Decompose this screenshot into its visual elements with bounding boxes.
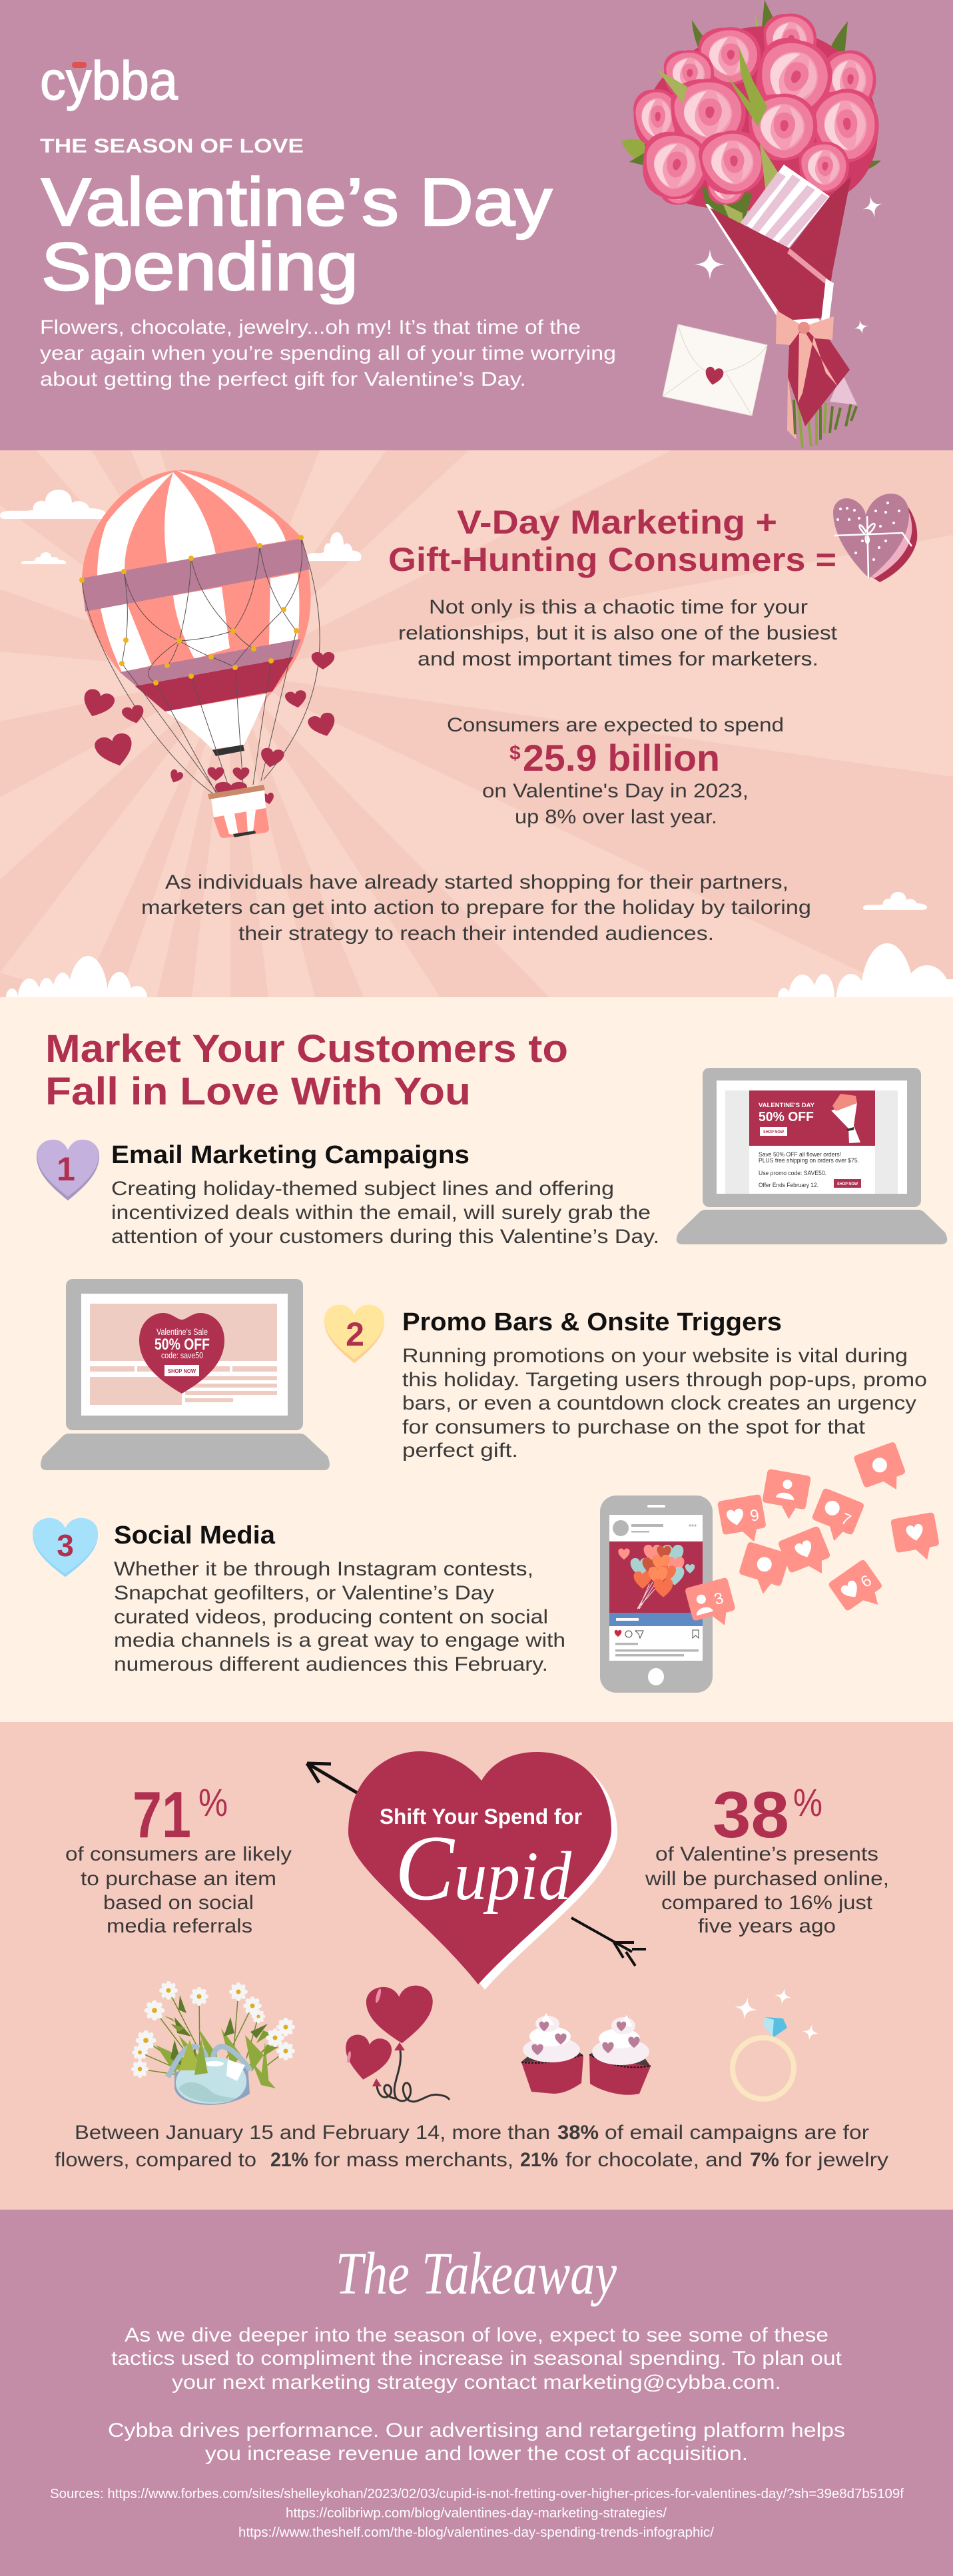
phone (600, 1496, 713, 1693)
bubble: heart 9 (717, 1494, 769, 1547)
heart heading: Shift Your Spend for (380, 1805, 582, 1829)
text: about Cybba: you increase revenue and lower the cost of acquisition. (205, 2443, 748, 2465)
item 3: social media (114, 1521, 565, 1675)
icon: candy heart 1: 1 (57, 1150, 75, 1188)
item 1: email marketing: Creating holiday-themed subject lines and offering (111, 1178, 614, 1200)
heading: Gift-Hunting Consumers = (388, 541, 836, 578)
text: busy time: Not only is this a chaotic time for your (429, 596, 808, 618)
bubble: heart 6: 6 (858, 1571, 875, 1591)
illustration: balloon bunch (618, 1545, 695, 1609)
logo: cybba: cybba (40, 51, 178, 111)
text: email campaigns comparison: for chocolate, and (565, 2149, 743, 2171)
text: email campaigns comparison: 21% (520, 2149, 558, 2171)
sources: https://www.theshelf.com/the-blog/valentines-day-spending-trends-infographic/ (238, 2525, 714, 2540)
icon: candy heart 1 (37, 1140, 99, 1200)
heading (388, 504, 836, 578)
panel: market your customers (0, 997, 953, 1722)
stat: 38 percent: of Valentine’s presents (655, 1843, 878, 1865)
laptop: email: SHOP NOW (763, 1130, 785, 1134)
arrow: upper left (307, 1763, 374, 1803)
panel: takeaway (0, 2210, 953, 2576)
text: email campaigns comparison: of email campaigns are for (605, 2122, 869, 2144)
stat: 38 percent: 38 (713, 1778, 789, 1851)
bubble: chat far (853, 1442, 910, 1500)
item 1: email marketing (111, 1141, 659, 1248)
illustration: flowers in kettle (131, 1981, 295, 2105)
bubble: chat 7 (807, 1488, 865, 1547)
bubble: person 3: 3 (712, 1589, 725, 1609)
stat: 25.9 billion: on Valentine's Day in 2023, (482, 780, 749, 802)
laptop: promo popup (41, 1279, 330, 1470)
laptop: email (677, 1068, 947, 1244)
item 2: promo bars: for consumers to purchase on the spot for that (402, 1416, 866, 1438)
stat: 71 percent: media referrals (107, 1915, 252, 1937)
text: takeaway body: As we dive deeper into the season of love, expect to see some of these (125, 2324, 828, 2346)
item 1: email marketing: incentivized deals within the email, will surely grab the (111, 1202, 651, 1224)
intro text: about getting the perfect gift for Valentine’s Day. (40, 368, 526, 390)
bubble: heart (890, 1512, 942, 1565)
text: busy time: relationships, but it is also one of the busiest (398, 622, 838, 644)
stat: 38 percent (645, 1778, 889, 1937)
item 3: social media: Whether it be through Instagram contests, (114, 1558, 533, 1580)
laptop: promo popup: code: save50 (161, 1351, 203, 1360)
item 2: promo bars: Promo Bars & Onsite Triggers (402, 1308, 782, 1336)
laptop: email: VALENTINE'S DAY (759, 1102, 815, 1109)
text: email campaigns comparison (55, 2122, 888, 2171)
item 3: social media: media channels is a great way to engage with (114, 1629, 565, 1651)
laptop: email: SHOP NOW (837, 1182, 858, 1186)
icon: candy heart 3 (33, 1518, 98, 1577)
text: takeaway body: tactics used to compliment the increase in seasonal spending. To plan out (111, 2348, 842, 2369)
stat: 38 percent: five years ago (698, 1915, 836, 1937)
cloud: bottom right (778, 943, 953, 997)
script word: Cupid: Cupid (395, 1817, 572, 1920)
bubble: person (760, 1469, 811, 1521)
text: email campaigns comparison: flowers, compared to (55, 2149, 256, 2171)
clouds (0, 490, 953, 1051)
text: about Cybba: Cybba drives performance. Our advertising and retargeting platform helps (108, 2419, 845, 2441)
laptop: promo popup: SHOP NOW (168, 1368, 196, 1374)
stat: 71 percent: of consumers are likely (65, 1843, 292, 1865)
icon: heart gift box (833, 494, 917, 582)
text: busy time (398, 596, 838, 670)
cloud: bottom left (6, 956, 147, 997)
text: about Cybba (108, 2419, 845, 2465)
text: tailoring strategy: As individuals have already started shopping for their partners, (165, 871, 789, 893)
sources (50, 2487, 904, 2540)
icon: candy heart 2 (324, 1305, 384, 1363)
title: Valentine’s Day (41, 165, 553, 240)
bubble: person 3 (685, 1577, 739, 1633)
illustration: heart balloons (340, 1985, 450, 2102)
stat: 25.9 billion: 25.9 billion (523, 737, 720, 779)
panel: header (0, 0, 953, 451)
stat: 38 percent: compared to 16% just (661, 1892, 873, 1914)
item 1: email marketing: attention of your customers during this Valentine’s Day. (111, 1226, 659, 1248)
text: tailoring strategy (141, 871, 811, 945)
stat: 71 percent: to purchase an item (81, 1868, 276, 1890)
icon: candy heart 3: 3 (57, 1528, 74, 1563)
stat: 25.9 billion: up 8% over last year. (515, 806, 717, 828)
text: email campaigns comparison: for jewelry (785, 2149, 888, 2171)
laptop: promo popup: 50% OFF (155, 1336, 210, 1354)
laptop: email: PLUS free shipping on orders over $75. (759, 1157, 859, 1164)
laptop: email: Save 50% OFF all flower orders! (759, 1151, 841, 1158)
stat: 25.9 billion (447, 714, 784, 828)
panel: V-Day marketing (0, 450, 953, 1051)
stat: 25.9 billion: Consumers are expected to spend (447, 714, 784, 736)
stat: 38 percent: % (793, 1781, 822, 1825)
laptop: promo popup: Valentine’s Sale (157, 1327, 208, 1337)
arrow: lower right (571, 1918, 646, 1966)
laptop: email: Offer Ends February 12. (759, 1182, 818, 1188)
text: email campaigns comparison: Between January 15 and February 14, more than (75, 2122, 550, 2144)
bubble: chat (735, 1541, 791, 1598)
item 3: social media: Social Media (114, 1521, 276, 1549)
item 3: social media: curated videos, producing content on social (114, 1606, 548, 1628)
kicker: THE SEASON OF LOVE (40, 135, 304, 157)
text: busy time: and most important times for marketers. (418, 648, 818, 670)
heading (45, 1027, 568, 1113)
item 2: promo bars: Running promotions on your website is vital during (402, 1345, 908, 1367)
icon: candy heart 2: 2 (346, 1316, 364, 1353)
stat: 71 percent: % (198, 1781, 228, 1825)
illustration: cupcakes (521, 2013, 651, 2095)
title: Spending (41, 230, 358, 304)
text: email campaigns comparison: for mass merchants, (314, 2149, 513, 2171)
sources: Sources: https://www.forbes.com/sites/shelleykohan/2023/02/03/cupid-is-not-fretting-over-higher-prices-for-valentines-day/?sh=39e8d7b5109f (50, 2487, 904, 2501)
sources: https://colibriwp.com/blog/valentines-day-marketing-strategies/ (286, 2506, 667, 2521)
illustration: bouquet (621, 0, 884, 448)
text: takeaway body: your next marketing strategy contact marketing@cybba.com. (172, 2371, 781, 2393)
heading: V-Day Marketing + (457, 504, 777, 541)
panel: shift your spend (0, 1722, 953, 2210)
laptop: email: 50% OFF (759, 1110, 814, 1124)
item 2: promo bars: this holiday. Targeting users through pop-ups, promo (402, 1369, 927, 1391)
bubble: heart center (777, 1525, 835, 1585)
item 2: promo bars: bars, or even a countdown clock creates an urgency (402, 1392, 916, 1414)
text: takeaway body (111, 2324, 842, 2393)
bubble: heart 6 (828, 1559, 890, 1621)
intro text: year again when you’re spending all of your time worrying (40, 342, 616, 364)
item 3: social media: numerous different audiences this February. (114, 1653, 548, 1675)
text: email campaigns comparison: 38% (557, 2122, 599, 2144)
stat: 38 percent: will be purchased online, (645, 1868, 889, 1890)
bubble: heart 9: 9 (749, 1506, 761, 1525)
notification bubbles (685, 1442, 942, 1633)
item 1: email marketing: Email Marketing Campaigns (111, 1141, 470, 1169)
heading: Fall in Love With You (45, 1070, 471, 1113)
text: email campaigns comparison: 7% (750, 2149, 779, 2171)
heading: The Takeaway: The Takeaway (336, 2241, 617, 2307)
text: tailoring strategy: marketers can get into action to prepare for the holiday by tailoring (141, 897, 811, 919)
stat: 71 percent (65, 1778, 292, 1937)
intro text: Flowers, chocolate, jewelry...oh my! It’s that time of the (40, 316, 581, 338)
bubble: chat 7: 7 (838, 1509, 854, 1529)
item 2: promo bars: perfect gift. (402, 1440, 518, 1462)
intro text (40, 316, 616, 390)
laptop: email: Use promo code: SAVE50. (759, 1170, 826, 1176)
cupid heart (348, 1751, 617, 1990)
illustration: diamond ring (732, 1987, 820, 2099)
item 3: social media: Snapchat geofilters, or Valentine’s Day (114, 1582, 494, 1604)
text: tailoring strategy: their strategy to reach their intended audiences. (238, 923, 714, 945)
stat: 25.9 billion: $ (509, 742, 521, 764)
title (41, 165, 553, 304)
stat: 71 percent: based on social (103, 1892, 254, 1914)
stat: 71 percent: 71 (133, 1778, 191, 1851)
illustration: hot air balloon (78, 470, 340, 838)
text: email campaigns comparison: 21% (270, 2149, 308, 2171)
heading: Market Your Customers to (45, 1027, 568, 1071)
item 2: promo bars (402, 1308, 927, 1462)
